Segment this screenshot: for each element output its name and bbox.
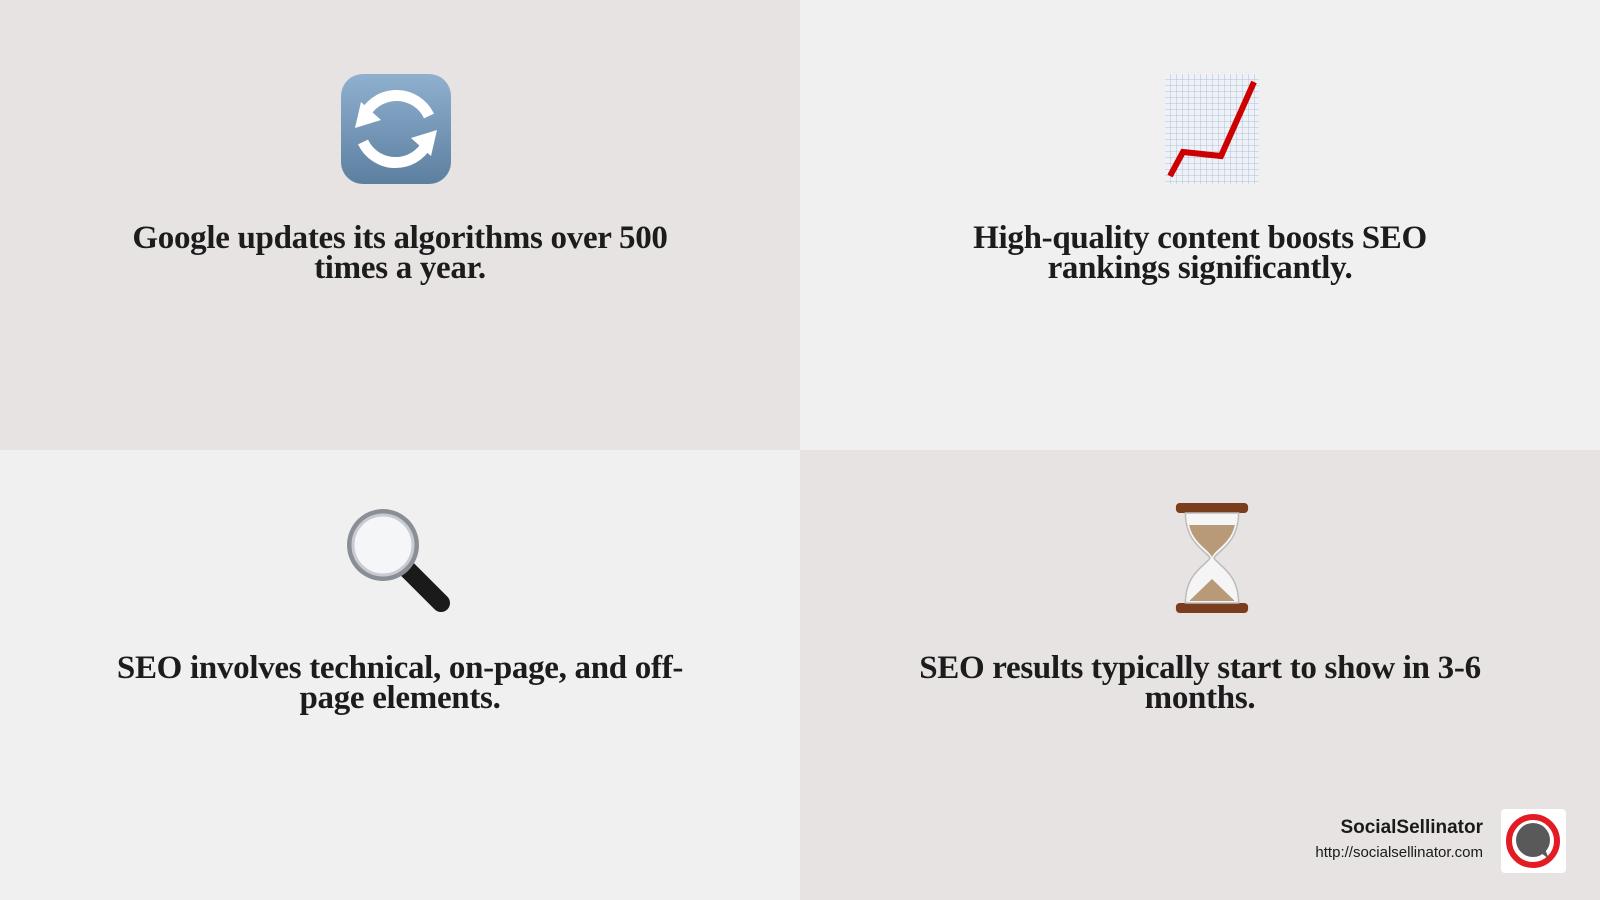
text: content quality: rankings significantly. [1048, 250, 1352, 286]
text: algorithm updates: times a year. [314, 250, 486, 286]
panel: SEO timeline [800, 450, 1600, 900]
panel: content quality [800, 0, 1600, 450]
text: content quality [973, 220, 1427, 286]
brand: SocialSellinator text [1315, 817, 1483, 861]
text: SEO timeline: SEO results typically start to show in 3-6 [919, 650, 1481, 686]
panel: algorithm updates [0, 0, 800, 450]
icon: magnifier [347, 509, 450, 612]
text: SEO timeline: months. [1145, 680, 1255, 716]
text: algorithm updates: Google updates its algorithms over 500 [132, 220, 668, 256]
text: SEO elements: SEO involves technical, on-page, and off- [117, 650, 683, 686]
brand: SocialSellinator text: http://socialsellinator.com [1315, 844, 1483, 861]
text: SEO elements [117, 650, 683, 716]
panel: SEO elements [0, 450, 800, 900]
icon: chart [1165, 74, 1259, 184]
icon: refresh [341, 74, 451, 184]
logo [1501, 809, 1566, 873]
text: SEO timeline [919, 650, 1481, 716]
brand: SocialSellinator text: SocialSellinator [1340, 817, 1483, 838]
text: algorithm updates [132, 220, 668, 286]
icon: hourglass [1176, 503, 1248, 613]
text: SEO elements: page elements. [299, 680, 501, 716]
text: content quality: High-quality content boosts SEO [973, 220, 1427, 256]
